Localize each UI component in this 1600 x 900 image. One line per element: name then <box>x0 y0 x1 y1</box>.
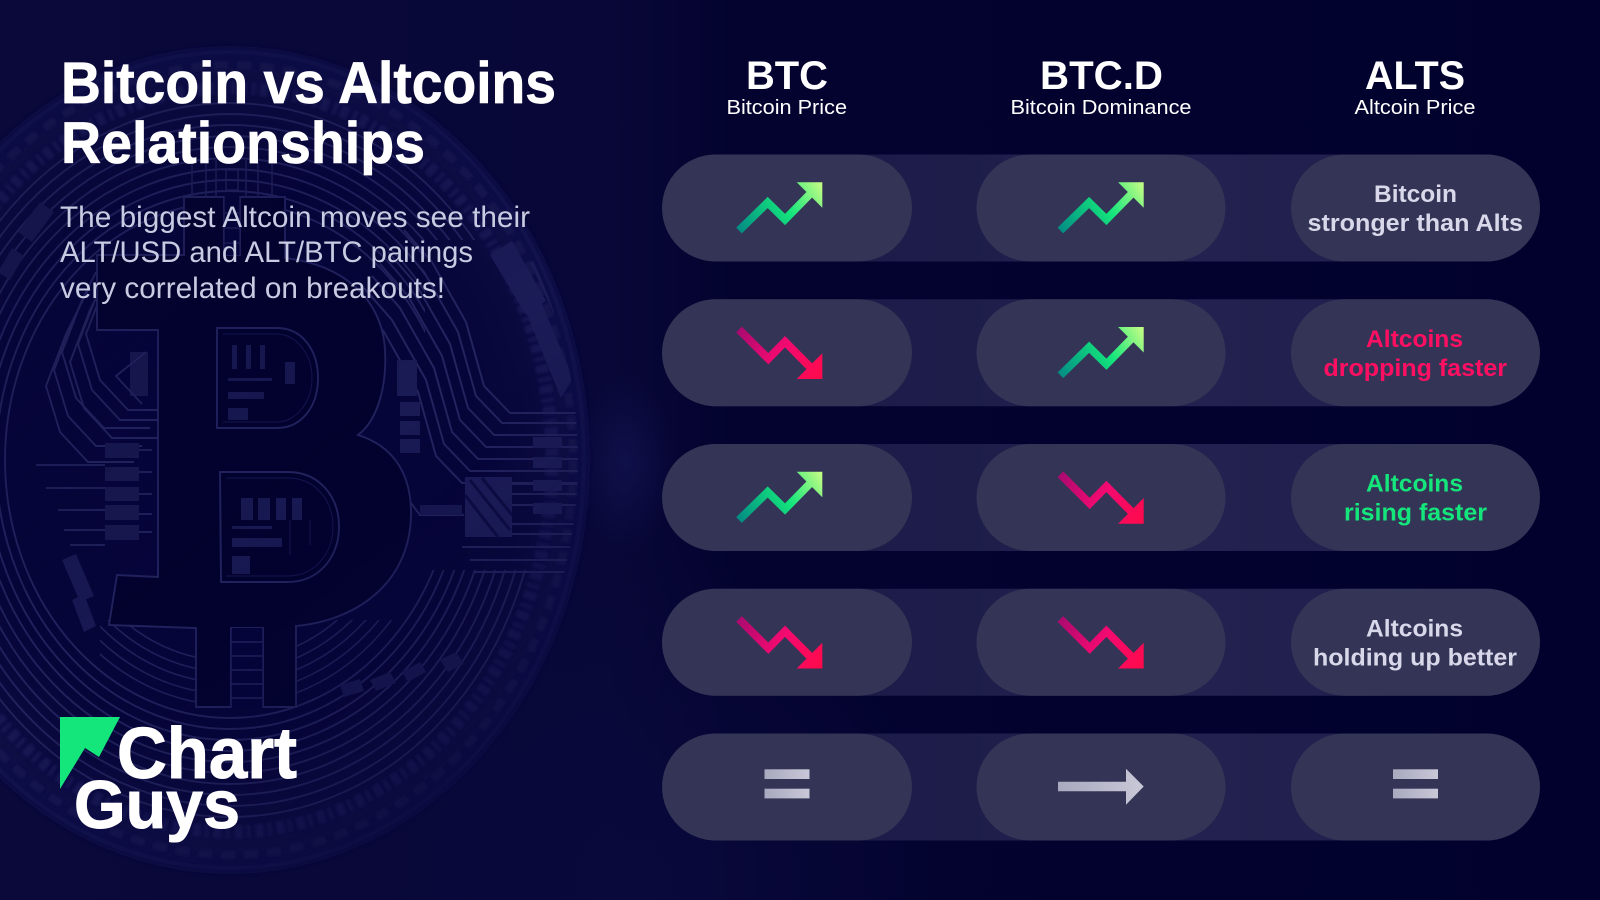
bottom ladder <box>231 628 263 707</box>
icon: BTC down arrow <box>739 619 822 668</box>
B upper counter <box>217 328 318 428</box>
result text: Altcoins <box>1366 470 1463 498</box>
icon: BTC.D right arrow <box>1058 769 1144 805</box>
icon: BTC up arrow <box>739 472 822 520</box>
icon: BTC.D down arrow <box>1060 474 1144 524</box>
B lower counter <box>220 472 339 582</box>
column header: BTC: Bitcoin Price <box>726 97 847 119</box>
inner lower rings <box>100 620 392 702</box>
icon: BTC.D down arrow <box>1060 619 1144 668</box>
coin disc <box>0 46 590 874</box>
center chip right <box>397 360 512 537</box>
circuit traces left <box>0 202 464 697</box>
result text <box>1324 326 1507 382</box>
logo wordmark: Guys <box>74 767 240 843</box>
icon: BTC down arrow <box>739 330 822 379</box>
column header: BTC.D <box>1010 54 1192 119</box>
logo: Chart Guys <box>60 714 297 843</box>
bitcoin symbol <box>97 160 411 707</box>
column header: BTC <box>726 54 847 119</box>
row 3: Altcoins rising faster <box>662 444 1540 551</box>
top stems detail <box>192 160 272 255</box>
icon: BTC up arrow <box>739 182 822 230</box>
column header: ALTS <box>1354 54 1476 119</box>
row 1: Bitcoin stronger than Alts <box>662 154 1540 262</box>
row 4: Altcoins holding up better <box>662 589 1540 696</box>
result text: Bitcoin <box>1374 181 1457 208</box>
subtitle: very correlated on breakouts! <box>60 272 445 305</box>
logo wordmark <box>74 714 297 843</box>
icon: BTC equals <box>764 769 810 798</box>
icon: ALTS equals <box>1393 769 1438 798</box>
background image: bitcoin coin <box>0 46 588 872</box>
result text: holding up better <box>1313 644 1517 671</box>
column header: ALTS: ALTS <box>1365 54 1465 98</box>
title: Relationships <box>61 111 425 176</box>
column header: ALTS: Altcoin Price <box>1354 97 1476 119</box>
subtitle: ALT/USD and ALT/BTC pairings <box>60 236 473 269</box>
column header: BTC: BTC <box>746 54 828 98</box>
result text <box>1313 615 1517 671</box>
icon: BTC.D up arrow <box>1060 327 1144 375</box>
subtitle <box>60 201 530 305</box>
concentric circuit rings <box>0 103 540 817</box>
result text: dropping faster <box>1324 355 1507 382</box>
result text: stronger than Alts <box>1308 210 1523 237</box>
logo mark <box>60 717 120 789</box>
column header: BTC.D: Bitcoin Dominance <box>1010 97 1192 119</box>
icon: BTC.D up arrow <box>1060 182 1144 230</box>
result text <box>1308 181 1523 237</box>
rim texture <box>0 52 584 868</box>
title <box>61 51 556 176</box>
subtitle: The biggest Altcoin moves see their <box>60 201 530 234</box>
title: Bitcoin vs Altcoins <box>61 51 556 116</box>
circuit traces right <box>364 230 578 573</box>
logo wordmark: Chart <box>117 714 297 794</box>
result text: Altcoins <box>1366 326 1463 353</box>
column header: BTC.D: BTC.D <box>1040 54 1163 98</box>
row 2: Altcoins dropping faster <box>662 299 1540 406</box>
result text: rising faster <box>1344 500 1487 526</box>
row 5: neutral <box>662 734 1540 840</box>
result text <box>1344 470 1487 526</box>
result text: Altcoins <box>1366 615 1463 642</box>
